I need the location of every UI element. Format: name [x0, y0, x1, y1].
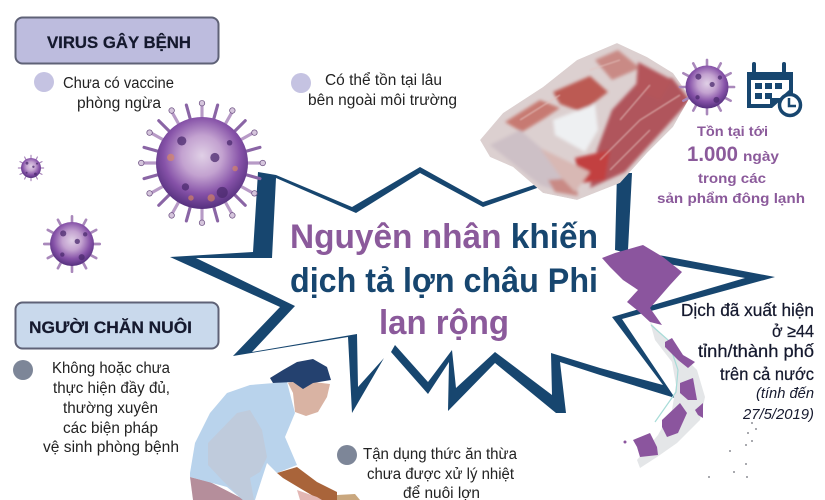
text: survives outside: bên ngoài môi trường [308, 92, 457, 109]
icon: medium virus [44, 216, 100, 272]
text: survives 1000 days: ngày [743, 148, 779, 164]
text: spread across provinces: ở ≥44 [772, 321, 814, 341]
starburst frame [170, 167, 775, 413]
icon: bullet [337, 445, 357, 465]
title: dịch tả lợn châu Phi [290, 262, 598, 300]
text: no vaccine [63, 75, 174, 112]
text: survives outside: Có thể tồn tại lâu [325, 72, 442, 89]
text: spread across provinces: (tính đến [756, 385, 814, 402]
text: hygiene: các biện pháp [63, 420, 158, 437]
text: hygiene: thực hiện đầy đủ, [53, 380, 170, 397]
text: leftover feed: Tận dụng thức ăn thừa [363, 446, 517, 463]
icon: calendar with clock [747, 62, 800, 116]
icon: small virus [18, 155, 44, 181]
icon: bullet [34, 72, 54, 92]
title [290, 218, 598, 342]
heading box: virus [16, 18, 218, 64]
text: spread across provinces: Dịch đã xuất hiện [681, 300, 814, 320]
text: spread across provinces: trên cả nước [720, 364, 814, 384]
text: survives 1000 days: 1.000 [687, 143, 738, 166]
title: lan rộng [379, 304, 509, 342]
text: leftover feed [363, 446, 517, 500]
heading box: farmers: NGƯỜI CHĂN NUÔI [29, 318, 192, 337]
map: Vietnam [602, 245, 757, 478]
text: hygiene: vệ sinh phòng bệnh [43, 439, 179, 456]
text: survives 1000 days: Tồn tại tới [697, 123, 768, 139]
heading box: virus: VIRUS GÂY BỆNH [47, 33, 191, 52]
icon: small virus beside meat [680, 60, 734, 114]
text: hygiene: Không hoặc chưa [52, 360, 170, 377]
text: survives 1000 days [657, 123, 805, 206]
title: Nguyên nhân khiến [290, 218, 598, 256]
text: no vaccine: phòng ngừa [77, 95, 161, 112]
heading box: farmers [16, 302, 218, 348]
text: leftover feed: chưa được xử lý nhiệt [367, 466, 515, 483]
icon: bullet [13, 360, 33, 380]
icon: large virus [139, 100, 265, 226]
text: survives 1000 days: sản phẩm đông lạnh [657, 190, 805, 206]
text: no vaccine: Chưa có vaccine [63, 75, 174, 92]
text: hygiene [43, 360, 179, 456]
illustration: farmer [190, 359, 360, 500]
text: spread across provinces: 27/5/2019) [742, 406, 814, 423]
text: survives outside [308, 72, 457, 109]
image: frozen meat [480, 43, 690, 200]
text: survives 1000 days: trong các [698, 170, 766, 186]
text: spread across provinces: tỉnh/thành phố [698, 341, 814, 361]
icon: bullet [291, 73, 311, 93]
text: spread across provinces [681, 300, 814, 423]
text: hygiene: thường xuyên [63, 400, 158, 417]
